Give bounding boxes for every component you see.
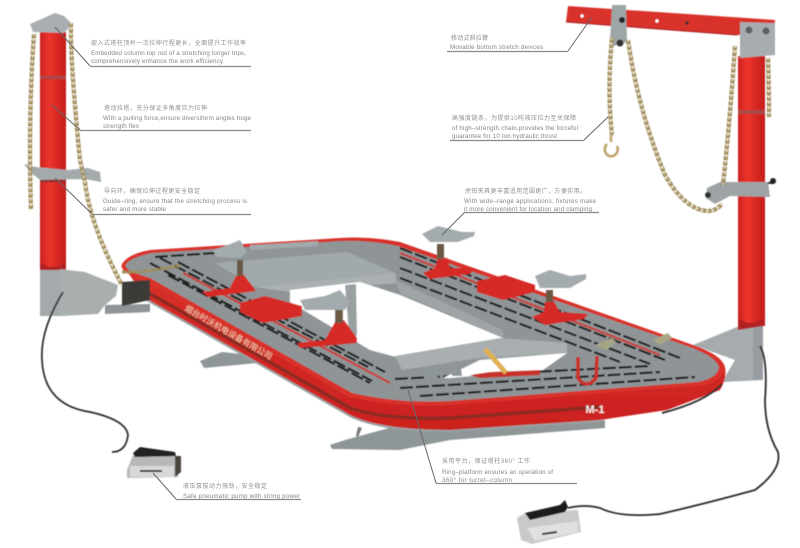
callout: pulling force: strength flex: [103, 123, 140, 130]
platform model label: M-1: [586, 404, 604, 416]
callout: pulling force: 塔动拉塔，充分保证多角度巨力拉伸: [104, 104, 207, 112]
shackle: [578, 356, 597, 384]
callout: high strength chain: of high–strength chain,provides the forceful: [452, 125, 578, 132]
callout: guide ring: [55, 178, 251, 214]
callout: column top rod: comprehensively enhance the work efficiency: [91, 58, 224, 65]
callout: movable bottom stretch: 移动式斜拉臂: [451, 34, 488, 42]
central hole and beams: [215, 252, 395, 287]
callout: guide ring: 导向环，确保拉伸过程更安全稳定: [104, 187, 200, 195]
callout: high strength chain: guarantee for 10 ton hydraulic thrust: [452, 133, 557, 140]
slots: [150, 248, 695, 396]
callout: fixtures: it more convenient for location and clamping: [464, 206, 593, 213]
left column: [24, 13, 150, 316]
guide ring clamp: [24, 164, 101, 182]
callout: pulling force: With a pulling force,ensure diversiform angles huge: [103, 115, 252, 122]
platform top face: [122, 238, 725, 406]
left pump: [127, 447, 181, 478]
red stripes: [183, 273, 390, 383]
small eye bolts: [595, 333, 672, 350]
right hose: [568, 346, 779, 515]
jack clamps: [202, 226, 588, 348]
callout: fixtures: With wide–range applications, fixtures make: [464, 198, 597, 205]
callout: guide ring: Guide–ring, ensure that the stretching process is: [103, 198, 247, 205]
right pump: [517, 500, 581, 544]
callout: ring platform: [408, 390, 577, 484]
left hose: [42, 292, 128, 452]
ring platform: [122, 238, 725, 431]
callout: pneumatic pump: 液压泵拔动力强劲，安全稳定: [183, 482, 267, 490]
callout: column top rod: 嵌入式塔柱顶杆一次拉伸行程更长，全面提升工作效率: [91, 39, 246, 47]
callout: fixtures: [442, 187, 599, 235]
platform red side band: [122, 264, 725, 430]
base feet: [200, 328, 605, 450]
callout: movable bottom stretch: Movable bottom stretch devices: [450, 44, 543, 51]
callout: fixtures: 虎钳夹具更丰富适用范围更广，方便实用。: [465, 187, 586, 195]
callout: pneumatic pump: Safe pneumatic pump with string power: [183, 493, 300, 500]
platform company name: 烟台时沃机电设备有限公司: [183, 303, 274, 362]
callout: movable bottom stretch: [447, 17, 592, 52]
callout: high strength chain: 高强度链条，为提供10吨液压拉力至关保障: [452, 114, 576, 122]
chains: [30, 23, 769, 285]
callout: ring platform: 采用平台，保证塔柱360° 工作: [442, 457, 530, 465]
callouts: [52, 17, 608, 500]
callout: pneumatic pump: [153, 473, 301, 500]
callout: column top rod: Embedded column top rod of a stretching longer trips,: [91, 50, 246, 57]
yellow handle: [485, 349, 506, 373]
callout: ring platform: Ring–platform ensures an operation of: [442, 469, 553, 476]
callout: pulling force: [52, 104, 252, 130]
icon: hook: [605, 135, 618, 156]
right column and arm: [566, 5, 776, 382]
red pull blocks: [240, 275, 535, 323]
callout: column top rod: [55, 27, 251, 66]
column anchor and chain tail: [122, 266, 180, 306]
callout: high strength chain: [450, 114, 608, 140]
column cap: [30, 13, 72, 33]
callout: ring platform: 360° for turret–column: [442, 477, 513, 484]
callout: guide ring: safer and more stable: [103, 206, 167, 213]
